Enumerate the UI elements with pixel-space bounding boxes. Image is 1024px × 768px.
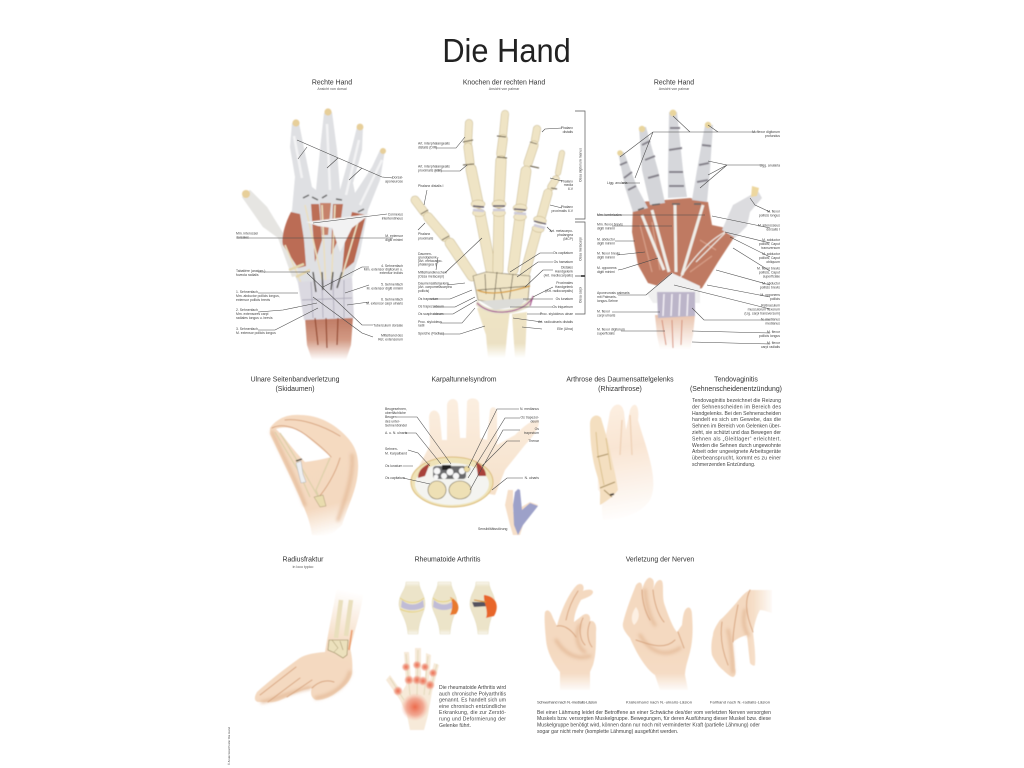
labels: palmar hand right: Ligg. anularia — [760, 164, 780, 168]
labels: bones left: radii — [418, 324, 425, 328]
labels: bones left: phalangea I) — [418, 262, 437, 266]
labels: dorsal hand left: extensor pollicis brevis — [236, 298, 270, 302]
labels: bones right: Phalanx — [561, 126, 573, 130]
labels: palmar hand right: transversum — [761, 246, 780, 250]
labels: bones left: Os scaphoideum — [418, 312, 444, 316]
heading: tendovaginitis: (Sehnenscheidenentzündung) — [690, 386, 782, 393]
labels: dorsal hand right: Tuberculum dorsale — [373, 324, 403, 328]
labels: palmar hand left: superficialis — [597, 332, 615, 336]
labels: dorsal hand right: Ret. extensorum — [378, 338, 403, 342]
labels: bones right: proximalis II-V — [552, 209, 574, 213]
panel: nerve injuries — [537, 556, 772, 735]
labels: palmar hand left: digiti minimi — [597, 256, 615, 260]
labels: bones left: Daumensattelgelenk — [418, 282, 449, 286]
labels: palmar hand left: M. flexor brevis — [597, 252, 620, 256]
heading: Skidaumen: Ulnare Seitenbandverletzung — [251, 376, 340, 384]
illustration: dorsal hand anatomy — [242, 108, 386, 360]
labels: bones left: Phalanx — [418, 232, 431, 236]
labels: palmar hand left: digiti minimi — [597, 242, 615, 246]
labels: bones right: media — [564, 183, 573, 187]
labels: bones right: (MCP) — [563, 237, 573, 241]
labels: carpal tunnel: Os trapezoi- — [521, 416, 539, 420]
labels: bones left: (Art. carpometacarpea — [418, 285, 452, 289]
labels: bones right: distalis — [563, 130, 573, 134]
text block: rheumatoid arthritis: rung und Deformierung der — [439, 716, 506, 722]
heading: Rhizarthrose — [566, 376, 674, 393]
labels: bones right: Handgelenk — [555, 285, 573, 289]
labels: bones left: Daumen- — [418, 252, 432, 256]
text block: rheumatoid arthritis — [439, 685, 506, 729]
illustration: joint stages — [399, 582, 497, 634]
text block: tendovaginitis: handelt es sich um Gewebe, das die — [692, 417, 781, 423]
text block: nerve injuries — [537, 710, 771, 735]
labels: palmar hand left: digiti minimi — [597, 226, 615, 230]
labels: carpal tunnel: Os — [535, 427, 539, 431]
illustration: thumb hand — [270, 415, 358, 536]
labels: palmar hand left: Mm. lumbricales — [597, 213, 622, 217]
panel: ulnar collateral ligament injury — [251, 376, 358, 536]
labels: dorsal hand right: aponeurose — [385, 180, 403, 184]
labels: palmar hand right: carpi radialis — [761, 345, 780, 349]
labels: carpal tunnel — [385, 407, 540, 531]
labels: palmar hand left: M. flexor — [597, 310, 611, 314]
labels: dorsal hand right: intertendineus — [382, 216, 403, 220]
labels: dorsal hand left: Mm. interossei — [236, 232, 258, 236]
labels: palmar hand left: mit Palmaris- — [597, 295, 617, 299]
labels: bones right: Distales — [561, 266, 573, 270]
labels: dorsal hand left: 3. Sehnenfach — [236, 327, 258, 331]
heading: palmar hand — [654, 80, 694, 91]
labels: dorsal hand left: Mm. extensores carpi — [236, 312, 269, 316]
text block: rheumatoid arthritis: genannt. Es handelt sich um — [439, 698, 506, 704]
labels: palmar hand right: M. flexor — [767, 341, 781, 345]
labels: palmar hand left: Mm. flexor brevis — [597, 222, 623, 226]
heading: Rhizarthrose: (Rhizarthrose) — [598, 386, 642, 393]
labels: dorsal hand right: 6. Sehnenfach — [381, 298, 403, 302]
labels: dorsal hand left: Mm. abductor pollicis longus, — [236, 294, 280, 298]
heading: tendovaginitis — [690, 376, 782, 393]
labels: dorsal hand right: M. extensor digiti minimi — [367, 286, 403, 290]
labels: dorsal hand left: M. extensor pollicis longus — [236, 331, 276, 335]
labels: bones right: Proximales — [556, 281, 573, 285]
labels: carpal tunnel: deum — [531, 420, 539, 424]
panel: radius fracture — [255, 556, 364, 702]
labels: bones left: proximalis (PIP) — [418, 168, 442, 172]
heading: tendovaginitis: Tendovaginitis — [714, 376, 758, 384]
labels: dorsal hand left: foveola radialis — [236, 273, 259, 277]
text block: nerve injuries: Muskelgruppe benötigt wird, können dann nur noch mit verminderter Kraft (partielle Lähmung) oder — [537, 722, 760, 728]
labels: bones right: Os triquetrum — [552, 305, 573, 309]
imprint: vertical small print: © Anatomical Poster Die Hand — [227, 727, 231, 765]
text block: rheumatoid arthritis: auch chronische Polyarthritis — [439, 691, 506, 697]
heading: Skidaumen: (Skidaumen) — [275, 386, 315, 393]
text block: tendovaginitis: der Sehnenscheiden im Bereich des — [692, 404, 781, 410]
labels: palmar hand left — [597, 181, 630, 336]
heading: dorsal hand: Rechte Hand — [312, 80, 352, 86]
labels: palmar hand right: pollicis longus — [759, 334, 780, 338]
heading: Radiusfraktur: in loco typico — [293, 565, 313, 569]
labels: palmar hand right: M. abductor — [762, 282, 781, 286]
captions: nerve hands: Krallenhand nach N.-ulnaris-Läsion — [626, 700, 692, 704]
illustration: Schwurhand — [545, 584, 596, 690]
labels: bones left: Art. interphalangealis — [418, 164, 450, 168]
text block: tendovaginitis: zieht, sie schützt und das Bewegen der — [692, 430, 781, 436]
labels: bones left: grundgelenk — [418, 256, 437, 260]
labels: bones left: Phalanx distalis I — [418, 184, 444, 188]
labels: bones right: Proc. styloideus ulnae — [540, 312, 573, 316]
labels: dorsal hand right: extensor indicis — [380, 271, 403, 275]
labels: dorsal hand right: 5. Sehnenfach — [381, 282, 403, 286]
labels: carpal tunnel: des unter- — [385, 420, 400, 424]
captions: nerve hands — [537, 700, 770, 704]
heading: Rhizarthrose: Arthrose des Daumensattelgelenks — [566, 376, 674, 384]
text block: nerve injuries: sogar gar nicht mehr (komplette Lähmung) ausgeführt werden. — [537, 729, 678, 735]
panel: dorsal view of right hand — [236, 80, 404, 360]
labels: bones left: distalis (DIP) — [418, 146, 437, 150]
text block: tendovaginitis: Werden die Sehnen durch ungewohnte — [692, 443, 781, 449]
text block: tendovaginitis: schmerzenden Entzündung. — [692, 462, 755, 468]
text block: tendovaginitis: Sehnen als „Gleitlager“ erleichtert. — [692, 436, 781, 442]
heading: bones — [463, 80, 545, 91]
labels: palmar hand right: musculorum flexorum — [748, 308, 780, 312]
labels: palmar hand right: M. interosseus — [758, 224, 780, 228]
heading: Skidaumen — [251, 376, 340, 393]
labels: bones left: proximalis — [418, 236, 434, 240]
illustration: palm with cross-section — [411, 398, 539, 535]
labels: palmar hand right: pollicis, Caput — [759, 242, 780, 246]
labels: bones right: Os capitatum — [553, 251, 573, 255]
text block: rheumatoid arthritis: Die rheumatoide Arthritis wird — [439, 685, 506, 691]
labels: palmar hand left: M. opponens — [597, 266, 617, 270]
labels: dorsal hand left: dorsales — [236, 236, 249, 240]
heading: Radiusfraktur — [283, 556, 324, 569]
text block: nerve injuries: Bei einer Lähmung leidet der Betroffene an einer Schwäche des/der vom verletzten Nerven versorgten — [537, 710, 771, 716]
bracket: bone groups: Ossa digitorum manus — [578, 148, 582, 182]
labels: dorsal hand right: digiti minimi — [385, 238, 403, 242]
text block: tendovaginitis: Sehnen im Bereich von Gelenken über- — [692, 424, 781, 430]
labels: dorsal hand right: Mm. extensor digitorum u. — [364, 268, 403, 272]
labels: palmar hand right: (Lig. carpi transversum) — [744, 312, 780, 316]
labels: palmar hand right: Retinaculum — [761, 304, 780, 308]
illustration: inflamed hand — [386, 648, 439, 730]
labels: carpal tunnel: Beugen — [385, 415, 397, 419]
labels: dorsal hand left: 1. Sehnenfach — [236, 290, 258, 294]
labels: bones right — [538, 126, 574, 331]
labels: dorsal hand right: 4. Sehnenfach — [381, 264, 403, 268]
labels: palmar hand right: M. flexor digitorum — [752, 130, 780, 134]
labels: carpal tunnel: Sehnenbündel — [385, 424, 407, 428]
labels: bones left: Speiche (Radius) — [418, 332, 444, 336]
text block: rheumatoid arthritis: Erkrankung, die zur Zerstö- — [439, 710, 506, 716]
leader lines: carpal tunnel — [397, 409, 523, 490]
labels: bones right: Art. metacarpo- — [550, 229, 573, 233]
leader lines: dorsal hand — [237, 140, 393, 337]
leader lines: bones — [418, 128, 562, 334]
illustration: Krallenhand — [623, 578, 693, 690]
labels: palmar hand right: pollicis, Caput — [759, 256, 780, 260]
captions: nerve hands: Schwurhand nach N.-medialis-Läsion — [537, 700, 597, 704]
labels: palmar hand left: longus-Sehne — [597, 299, 618, 303]
labels: bones left: Proc. styloideus — [418, 320, 442, 324]
labels: carpal tunnel: trapezium — [524, 431, 539, 435]
labels: carpal tunnel: N. ulnaris — [525, 476, 539, 480]
labels: bones right: Phalanx — [561, 205, 573, 209]
labels: palmar hand right: M. adductor — [762, 238, 781, 242]
heading: bones: Knochen der rechten Hand — [463, 80, 545, 86]
labels: palmar hand right: medianus — [765, 322, 780, 326]
labels: palmar hand right: M. adductor — [762, 252, 781, 256]
text block: nerve injuries: Muskels bzw. versorgten Muskelgruppe. Bewegungen, für deren Ausführung dieser Muskel bzw. diese — [537, 716, 771, 722]
labels: bones left: Os trapezoideum — [418, 304, 444, 308]
labels: dorsal hand left: 2. Sehnenfach — [236, 308, 258, 312]
labels: dorsal hand right: Connexus — [388, 212, 403, 216]
bracket: bone groups: Ossa metacarpi — [578, 237, 582, 261]
text block: tendovaginitis: Arbeit oder ungeeignete Arbeitsgeräte — [692, 449, 781, 455]
labels: bones right: phalangea — [557, 233, 573, 237]
labels: palmar hand left: Ligg. anularia — [607, 181, 627, 185]
heading: palmar hand: Rechte Hand — [654, 80, 694, 86]
captions: nerve hands: Fallhand nach N.-radialis-Läsion — [710, 700, 770, 704]
heading: bones: Ansicht von palmar — [489, 87, 520, 91]
labels: bones left: (Art. metacarpo- — [418, 259, 442, 263]
illustration: fractured wrist — [255, 586, 364, 702]
labels: bones right: Os hamatum — [554, 260, 573, 264]
labels: palmar hand right: pollicis, Caput — [759, 270, 780, 274]
labels: carpal tunnel: A. u. N. ulnaris — [385, 431, 408, 435]
text block: tendovaginitis: überbeansprucht, kommt es zu einer — [692, 456, 781, 462]
heading: dorsal hand: Ansicht von dorsal — [317, 87, 347, 91]
labels: dorsal hand right: Dorsal- — [392, 176, 403, 180]
labels: carpal tunnel: N. medianus — [520, 407, 539, 411]
labels: carpal tunnel: Thenar — [528, 439, 540, 443]
labels: palmar hand right: M. flexor brevis — [757, 266, 780, 270]
text block: tendovaginitis: Tendovaginitis bezeichnet die Reizung — [692, 398, 781, 404]
labels: carpal tunnel: Beugesehnen, — [385, 407, 407, 411]
labels: palmar hand right: N. medianus — [761, 318, 780, 322]
labels: dorsal hand left — [236, 232, 280, 335]
labels: palmar hand right: profundus — [765, 134, 780, 138]
heading: nerve injuries: Verletzung der Nerven — [626, 556, 694, 564]
panel: tendovaginitis text — [690, 376, 782, 468]
illustration: hand skeleton — [415, 114, 562, 358]
labels: bones left: pollicis) — [418, 289, 429, 293]
labels: bones left: Art. interphalangealis — [418, 142, 450, 146]
labels: palmar hand right: dorsalis I — [766, 228, 780, 232]
heading: rheumatoid arthritis: Rheumatoide Arthritis — [415, 556, 481, 564]
labels: bones right: Handgelenk — [555, 270, 573, 274]
heading: palmar hand: Ansicht von palmar — [659, 87, 690, 91]
text block: rheumatoid arthritis: Gelenke führt. — [439, 723, 471, 729]
panel: thumb saddle joint arthrosis — [566, 376, 674, 520]
heading: dorsal hand — [312, 80, 352, 91]
leader lines: palmar hand — [597, 116, 770, 344]
labels: palmar hand left: digiti minimi — [597, 270, 615, 274]
labels: bones right: Art. radioulnaris distalis — [538, 320, 573, 324]
title: Die Hand — [442, 32, 571, 69]
illustration: Fallhand — [711, 590, 772, 677]
heading: Radiusfraktur: Radiusfraktur — [283, 556, 324, 564]
labels: dorsal hand left: radiales longus u. brevis — [236, 316, 273, 320]
labels: carpal tunnel: Sehnen- — [385, 447, 398, 451]
labels: bones right: II-V — [568, 187, 574, 191]
text block: tendovaginitis — [692, 398, 781, 468]
labels: bones left: Os trapezium — [418, 297, 438, 301]
panel: carpal tunnel syndrome — [385, 376, 540, 535]
labels: dorsal hand right: M. extensor carpi ulnaris — [366, 302, 403, 306]
labels: palmar hand right: M. opponens — [760, 293, 780, 297]
labels: bones right: (Art. radiocarpalis) — [545, 289, 573, 293]
labels: palmar hand right: pollicis longus — [759, 214, 780, 218]
labels: carpal tunnel: M. Karpalband — [385, 452, 407, 456]
labels: bones left: Mittelhandknochen — [418, 270, 447, 274]
labels: bones right: (Art. mediocarpalis) — [544, 274, 573, 278]
labels: palmar hand right: obliquum — [766, 260, 780, 264]
labels: carpal tunnel: oberflächliche — [385, 411, 406, 415]
labels: bones right: Phalanx — [561, 180, 573, 184]
labels: palmar hand left: carpi ulnaris — [597, 314, 616, 318]
panel: palmar view of right hand — [597, 80, 781, 350]
labels: dorsal hand left: Tabatière (anatom.) — [236, 269, 265, 273]
labels: dorsal hand right: M. extensor — [385, 234, 404, 238]
bracket: bone groups: Ossa carpi — [578, 287, 582, 303]
labels: palmar hand right: pollicis — [770, 297, 780, 301]
text block: tendovaginitis: Handgelenks. Bei den Sehnenscheiden — [692, 411, 781, 417]
text block: rheumatoid arthritis: eine chronisch entzündliche — [439, 704, 506, 710]
labels: bones left — [418, 142, 452, 336]
bracket: bone groups — [575, 111, 585, 314]
labels: palmar hand right: M. flexor — [767, 330, 781, 334]
labels: palmar hand right: M. flexor — [767, 210, 781, 214]
illustration: palmar hand anatomy — [617, 110, 762, 350]
labels: palmar hand right — [744, 130, 781, 349]
labels: carpal tunnel: Sensibilitätsstörung — [478, 527, 508, 531]
panel: bones of right hand — [415, 80, 585, 358]
heading: carpal tunnel: Karpaltunnelsyndrom — [431, 376, 497, 384]
labels: palmar hand left: M. abductor — [597, 238, 616, 242]
illustration: thumb arthrosis hand — [590, 404, 653, 520]
panel: rheumatoid arthritis — [386, 556, 506, 730]
labels: carpal tunnel: Os capitatum — [385, 476, 405, 480]
labels: bones right: Elle (Ulna) — [557, 327, 573, 331]
labels: palmar hand left: M. flexor digitorum — [597, 328, 625, 332]
labels: palmar hand left: Aponeurosis palmaris — [597, 291, 630, 295]
labels: bones right: Os lunatum — [556, 297, 573, 301]
labels: palmar hand right: pollicis brevis — [760, 286, 780, 290]
labels: bones left: (Ossa metacarpi) — [418, 274, 444, 278]
labels: dorsal hand right — [364, 176, 404, 342]
labels: palmar hand right: superficiale — [763, 274, 780, 278]
labels: carpal tunnel: Os lunatum — [385, 464, 403, 468]
labels: dorsal hand right: Mittelband des — [381, 334, 403, 338]
